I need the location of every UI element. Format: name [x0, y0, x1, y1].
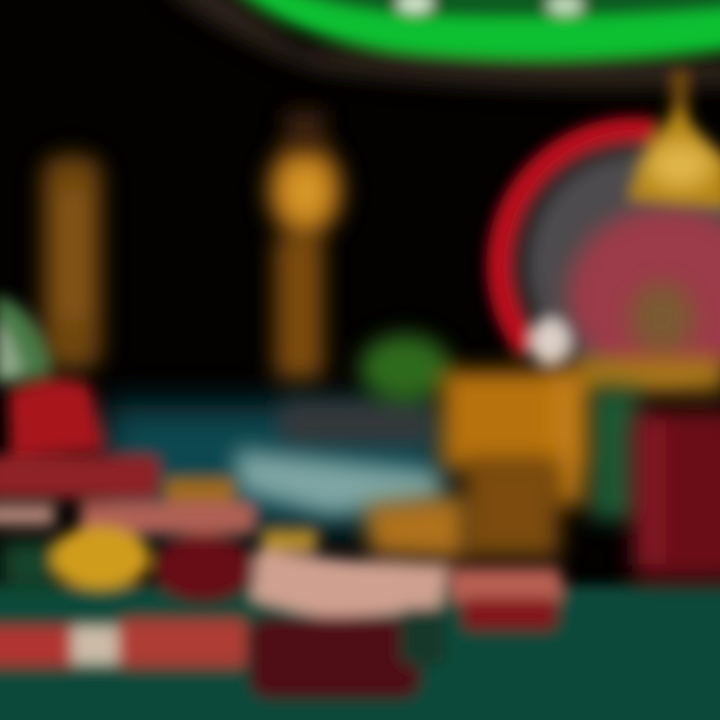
ceiling: green neon arc: [160, 0, 720, 88]
table surface: [0, 400, 720, 720]
red chip piles left: [0, 379, 255, 602]
left lamp post: [42, 155, 102, 370]
red chip stack right: [632, 410, 720, 580]
roulette wheel with red ring: [500, 131, 720, 392]
gold hanging lamp: [628, 70, 720, 208]
gold chip stacks: [365, 370, 640, 560]
green leaf at left: [0, 295, 52, 385]
green plant: [359, 334, 451, 402]
striped chips bottom left: [0, 618, 248, 668]
white and red chips centre: [250, 530, 562, 630]
centre lantern: [267, 110, 343, 380]
dark red chips bottom centre: [250, 610, 445, 698]
